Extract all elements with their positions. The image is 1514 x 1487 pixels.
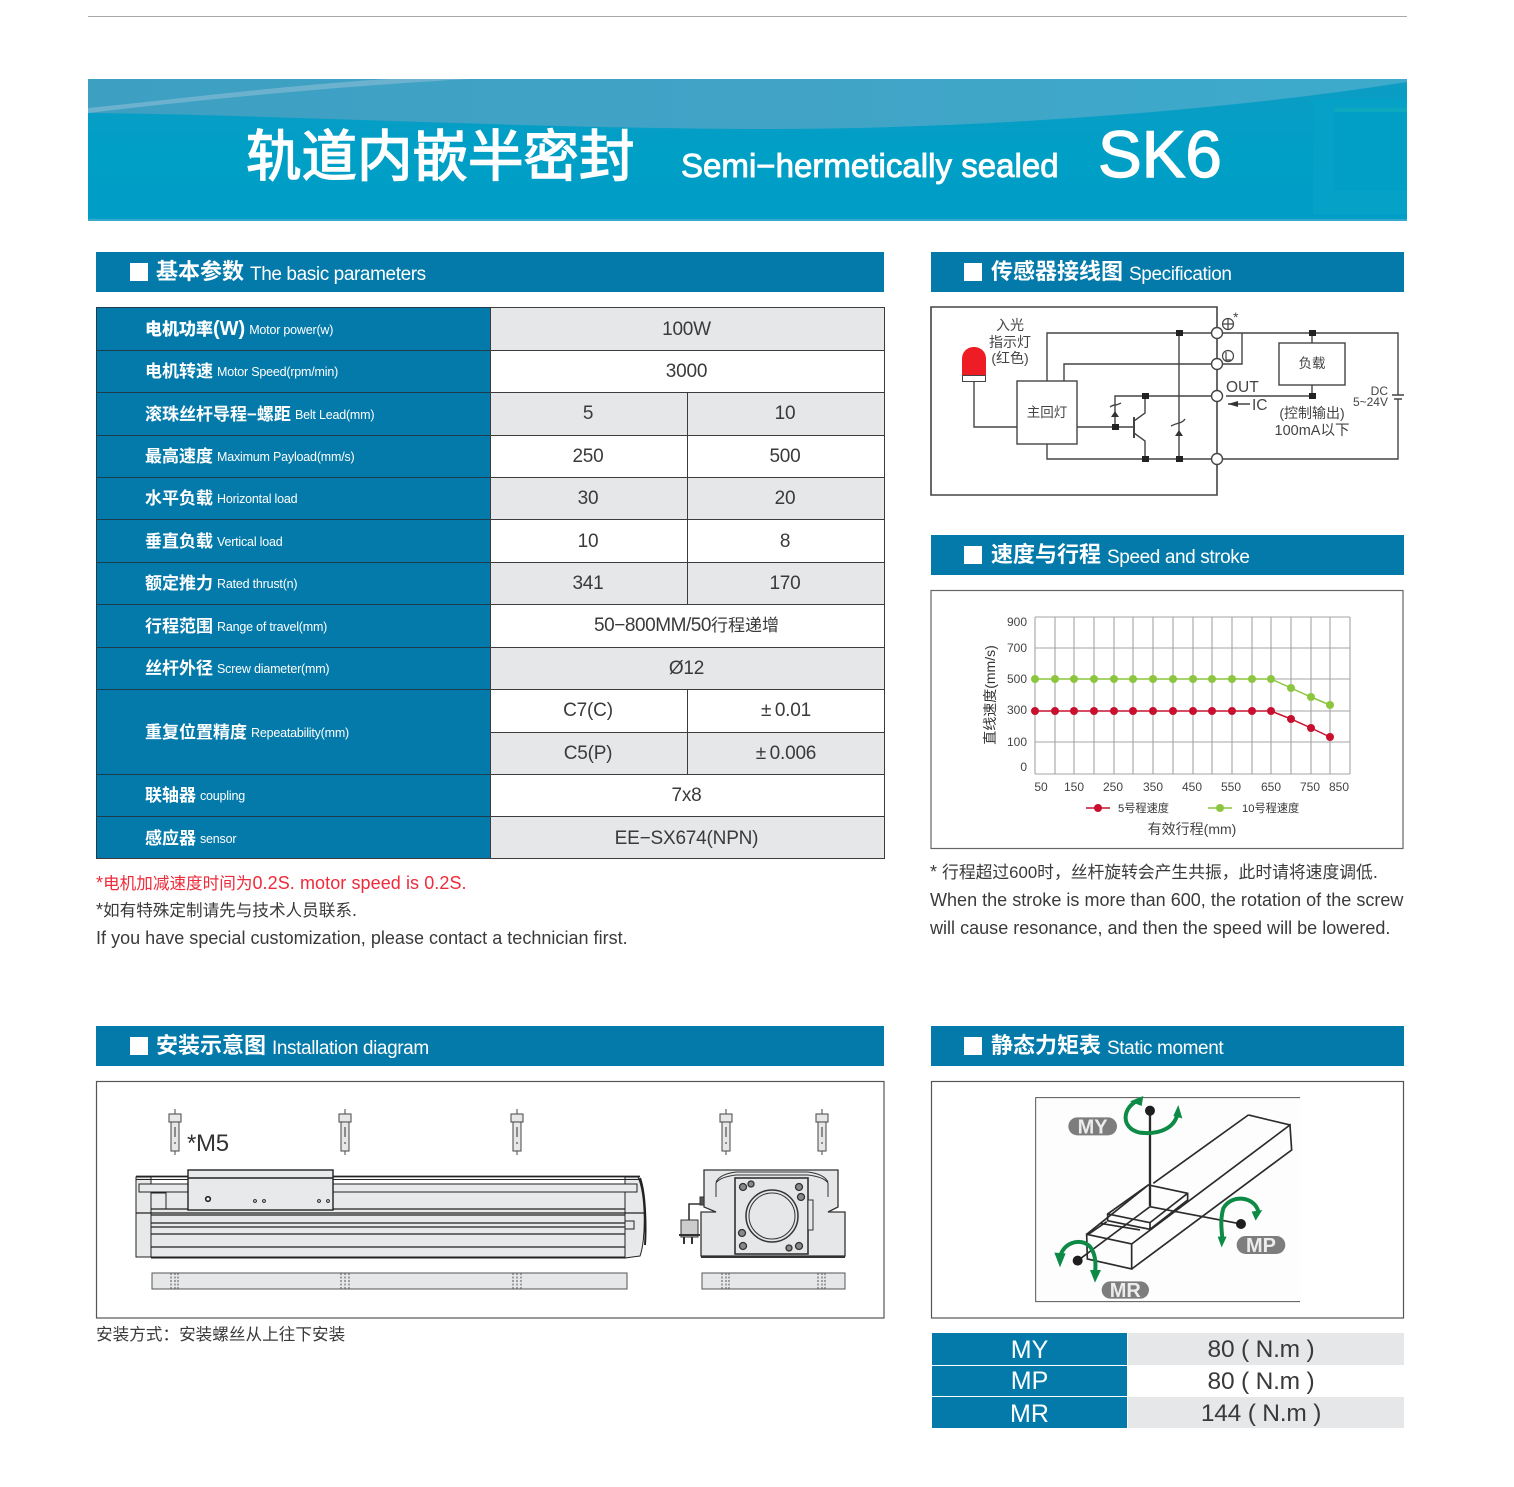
- row: sensor: [96, 816, 490, 859]
- title banner: [88, 79, 1407, 221]
- table: basic parameters: 8: [780, 531, 790, 552]
- row: coupling: [96, 774, 490, 816]
- legend: [1086, 801, 1299, 815]
- row: range of travel: Range of travel(mm): [217, 620, 327, 634]
- output labels: DC: [1371, 384, 1388, 398]
- static moment diagram panel: [930, 1080, 1404, 1319]
- row: horizontal load: 水平负载: [145, 489, 213, 508]
- row: horizontal load: [96, 477, 490, 519]
- row: motor speed: Motor Speed(rpm/min): [217, 365, 338, 379]
- heading: basic parameters: 基本参数 The basic parameters: [156, 259, 426, 285]
- row: vertical load: Vertical load: [217, 535, 282, 549]
- table: basic parameters: 341: [572, 573, 604, 594]
- row: screw diameter: Screw diameter(mm): [217, 662, 329, 676]
- output labels: [1226, 379, 1388, 439]
- x axis labels: 550: [1221, 780, 1241, 794]
- row: screw diameter: 丝杆外径: [145, 659, 213, 678]
- table: basic parameters: 30: [578, 488, 598, 509]
- table: basic parameters: 20: [775, 488, 795, 509]
- heading: static moment: 静态力矩表 Static moment: [991, 1033, 1223, 1059]
- heading: installation diagram: [96, 1026, 884, 1066]
- notes under table: [96, 873, 628, 948]
- note: customization English: If you have special customization, please contact a technician first.: [96, 928, 628, 948]
- moment illustration: MP: [1246, 1235, 1276, 1257]
- installation diagram panel: [96, 1080, 885, 1319]
- legend: 10号程速度: [1242, 801, 1299, 815]
- label: indicator lamp: 入光: [996, 317, 1024, 333]
- row: MR: [932, 1397, 1127, 1428]
- row: repeatability: Repeatability(mm): [251, 726, 349, 740]
- table: basic parameters: C5(P): [564, 743, 612, 764]
- moment illustration: MR: [1110, 1280, 1141, 1302]
- x axis labels: [1034, 780, 1349, 794]
- note: customization Chinese: *如有特殊定制请先与技术人员联系.: [96, 900, 357, 920]
- row: belt lead: 滚珠丝杆导程−螺距: [145, 404, 291, 424]
- note: acceleration time: *电机加减速度时间为0.2S. motor speed is 0.2S.: [96, 873, 467, 893]
- label: indicator lamp: 指示灯: [989, 334, 1031, 350]
- y axis title: 直线速度(mm/s): [982, 645, 998, 745]
- module end view: [679, 1170, 845, 1257]
- moment illustration: MY: [1078, 1116, 1108, 1138]
- module side view: [136, 1170, 645, 1258]
- x axis labels: 350: [1143, 780, 1163, 794]
- heading: wiring specification: [931, 252, 1404, 292]
- icon: red indicator lamp: [962, 347, 986, 382]
- row: maximum payload: [96, 435, 490, 477]
- table: basic parameters: 50−800MM/50: [594, 614, 711, 636]
- banner English subtitle: Semi−hermetically sealed: [681, 147, 1059, 184]
- y axis labels: 100: [1007, 735, 1027, 749]
- row: motor power: Motor power(w): [249, 323, 333, 337]
- note: installation method: 安装方式：安装螺丝从上往下安装: [96, 1325, 345, 1344]
- main circuit box: 主回灯: [1027, 405, 1067, 420]
- icon: screws: [169, 1109, 828, 1155]
- moment table: 144 ( N.m ): [1201, 1400, 1321, 1427]
- row: motor speed: [96, 350, 490, 392]
- label: indicator lamp: [989, 317, 1031, 366]
- row: MP: MP: [1011, 1367, 1048, 1395]
- row: motor power: 电机功率(W): [145, 318, 245, 340]
- x axis labels: 50: [1034, 780, 1048, 794]
- note: stroke resonance: will cause resonance, and then the speed will be lowered.: [930, 918, 1390, 938]
- main circuit box: [1017, 381, 1077, 444]
- x axis labels: 850: [1329, 780, 1349, 794]
- x axis labels: 150: [1064, 780, 1084, 794]
- table: basic parameters: 3000: [666, 361, 707, 382]
- moment illustration: [1036, 1096, 1300, 1302]
- heading: basic parameters: [96, 252, 884, 292]
- mounting plate end view: [702, 1273, 845, 1289]
- row: sensor: sensor: [200, 832, 236, 846]
- x axis labels: 750: [1300, 780, 1320, 794]
- table: basic parameters: ± 0.01: [761, 700, 811, 720]
- banner heading text: 轨道内嵌半密封: [246, 126, 635, 188]
- load box: [1279, 343, 1345, 385]
- row: MR: MR: [1010, 1400, 1049, 1428]
- row: coupling: 联轴器: [145, 786, 196, 805]
- x axis title: 有效行程(mm): [1148, 821, 1236, 837]
- row: range of travel: 行程范围: [145, 616, 213, 636]
- moment table: 80 ( N.m ): [1208, 1336, 1314, 1363]
- note: stroke resonance: [930, 862, 1404, 938]
- output labels: IC: [1252, 397, 1268, 414]
- table: basic parameters: 5: [583, 402, 593, 424]
- table: basic parameters: EE−SX674(NPN): [615, 828, 758, 848]
- note: stroke resonance: When the stroke is more than 600, the rotation of the screw: [930, 890, 1403, 910]
- series: 10 lead speed: [1031, 675, 1334, 709]
- note: stroke resonance: * 行程超过600时，丝杆旋转会产生共振，此时请将速度调低.: [930, 862, 1378, 882]
- wiring diagram: *: [1233, 309, 1239, 325]
- row: repeatability: [96, 689, 490, 774]
- row: screw diameter: [96, 647, 490, 689]
- row: motor power: [96, 307, 490, 350]
- row: rated thrust: [96, 562, 490, 604]
- table: basic parameters: 100W: [662, 319, 711, 340]
- banner model number: SK6: [1098, 118, 1222, 191]
- table: basic parameters: C7(C): [563, 700, 613, 720]
- heading: speed and stroke: 速度与行程 Speed and stroke: [991, 542, 1250, 568]
- moment table: [932, 1333, 1404, 1428]
- output labels: OUT: [1226, 379, 1259, 396]
- output labels: 100mA以下: [1275, 423, 1349, 439]
- table: basic parameters: 250: [572, 446, 604, 467]
- output labels: 5~24V: [1353, 395, 1388, 409]
- row: rated thrust: 额定推力: [145, 574, 213, 593]
- row: range of travel: [96, 604, 490, 647]
- output labels: (控制输出): [1279, 405, 1345, 421]
- table: basic parameters: Ø12: [669, 658, 704, 679]
- table: basic parameters: [96, 307, 885, 859]
- label: indicator lamp: (红色): [991, 350, 1029, 366]
- row: vertical load: [96, 519, 490, 562]
- row: maximum payload: Maximum Payload(mm/s): [217, 450, 354, 464]
- row: motor speed: 电机转速: [145, 362, 213, 381]
- y axis labels: 0: [1020, 760, 1027, 774]
- heading: speed and stroke: [931, 535, 1404, 575]
- table: basic parameters: 10: [578, 531, 598, 552]
- wiring diagram: [930, 306, 1404, 496]
- table: basic parameters: 7x8: [671, 785, 702, 806]
- row: maximum payload: 最高速度: [145, 447, 213, 466]
- row: MY: MY: [1011, 1336, 1048, 1364]
- y axis labels: 300: [1007, 703, 1027, 717]
- speed chart panel: [930, 590, 1404, 850]
- row: sensor: 感应器: [145, 828, 196, 848]
- y axis labels: 500: [1007, 672, 1027, 686]
- x axis labels: 650: [1261, 780, 1281, 794]
- y axis labels: 900: [1007, 615, 1027, 629]
- table: basic parameters: 170: [769, 573, 801, 594]
- heading: installation diagram: 安装示意图 Installation diagram: [156, 1033, 429, 1059]
- table: basic parameters: 500: [769, 446, 801, 467]
- load box: 负载: [1298, 356, 1326, 371]
- x axis labels: 450: [1182, 780, 1202, 794]
- row: coupling: coupling: [200, 789, 245, 803]
- icon: polarity symbols: [1222, 318, 1234, 362]
- row: repeatability: 重复位置精度: [145, 722, 247, 742]
- row: vertical load: 垂直负载: [145, 532, 213, 550]
- row: rated thrust: Rated thrust(n): [217, 577, 297, 591]
- row: horizontal load: Horizontal load: [217, 492, 297, 506]
- table: basic parameters: ± 0.006: [756, 743, 816, 764]
- heading: static moment: [931, 1026, 1404, 1066]
- y axis labels: 700: [1007, 641, 1027, 655]
- table: basic parameters: 行程递增: [711, 616, 779, 634]
- row: MP: [932, 1366, 1127, 1396]
- y axis labels: [1007, 615, 1027, 774]
- table: basic parameters: 10: [775, 402, 795, 424]
- row: belt lead: Belt Lead(mm): [295, 408, 374, 422]
- row: belt lead: [96, 392, 490, 435]
- x axis labels: 250: [1103, 780, 1123, 794]
- moment table: 80 ( N.m ): [1208, 1368, 1314, 1395]
- heading: wiring specification: 传感器接线图 Specification: [991, 259, 1232, 285]
- row: MY: [932, 1333, 1127, 1365]
- mounting plate side view: [152, 1273, 627, 1289]
- label: M5 screw: *M5: [187, 1130, 229, 1157]
- series: 5 lead speed: [1031, 707, 1334, 741]
- legend: 5号程速度: [1118, 801, 1169, 815]
- icon: terminals: [1212, 328, 1222, 464]
